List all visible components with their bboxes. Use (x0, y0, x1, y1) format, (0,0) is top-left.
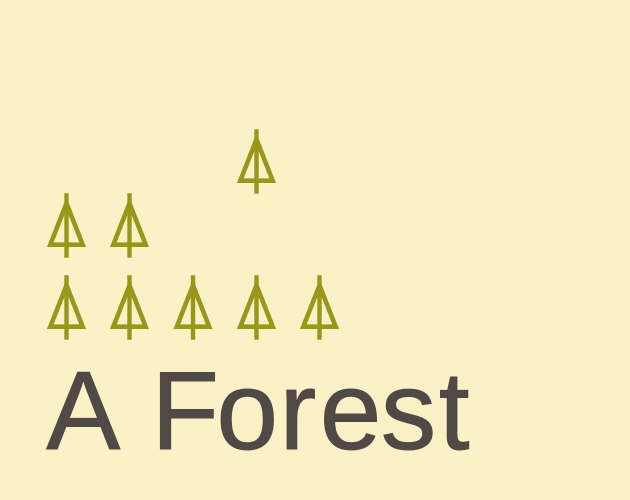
tree: bottom row 4 (240, 275, 273, 340)
tree: bottom row 2 (113, 275, 146, 340)
tree: top row (240, 129, 273, 194)
tree: bottom row 3 (177, 275, 209, 340)
tree: bottom row 5 (303, 275, 336, 340)
tree: middle row 1 (50, 193, 83, 258)
tree: middle row 2 (113, 193, 146, 258)
tree: bottom row 1 (50, 275, 83, 340)
title: A Forest (46, 349, 470, 473)
